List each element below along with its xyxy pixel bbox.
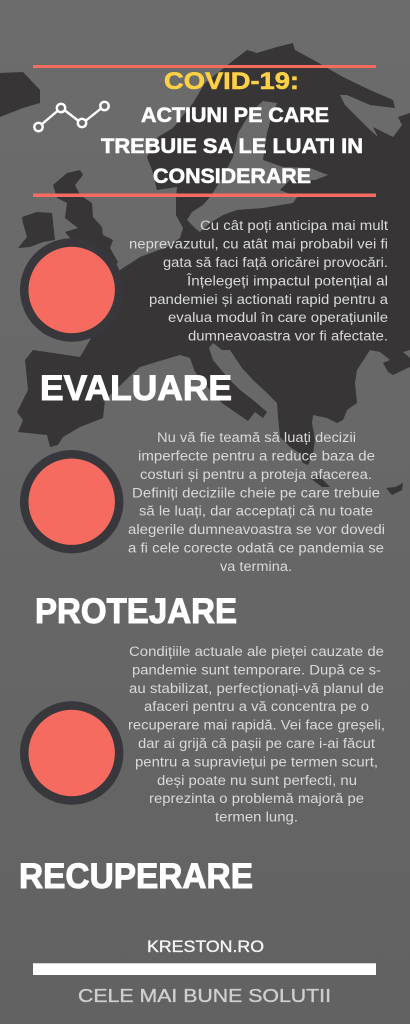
text block: intro: dumneavoastra vor fi afectate.: [188, 329, 388, 344]
map of Europe: [0, 43, 410, 495]
text block: intro: pandemiei și actionati rapid pentru a: [149, 292, 389, 307]
heading: RECUPERARE: RECUPERARE: [19, 856, 253, 896]
text block: recuperare: deși poate nu sunt perfecti, nu: [157, 773, 357, 788]
text block: protejare: să le luați, dar acceptați că nu toate: [139, 504, 373, 519]
text block: protejare: a fi cele corecte odată ce pandemia se: [128, 540, 384, 556]
text block: protejare: Nu vă fie teamă să luați decizii: [157, 430, 356, 445]
title top rule: [33, 65, 376, 68]
text block: intro: Cu cât poți anticipa mai mult: [200, 218, 388, 233]
text block: recuperare: Condițiile actuale ale pieței cauzate de: [129, 644, 384, 659]
text block: recuperare: termen lung.: [215, 810, 298, 825]
text block: protejare: Definiți deciziile cheie pe care trebuie: [132, 485, 380, 500]
text block: recuperare: recuperare mai rapidă. Vei face greșeli,: [128, 718, 385, 733]
title bottom rule: [33, 194, 376, 197]
icon: circle 1: [20, 238, 123, 342]
text block: protejare: alegerile dumneavoastra se vor dovedi: [128, 522, 385, 537]
text block: protejare: imperfecte pentru a reduce baza de: [138, 448, 375, 464]
text block: recuperare: dar ai grijă că pașii pe care i-ai făcut: [138, 736, 375, 751]
text block: intro: gata să faci față oricărei provocări.: [163, 255, 388, 270]
icon: line chart: [34, 102, 109, 131]
text block: recuperare: afaceri pentru a vă concentra pe o: [144, 699, 369, 714]
text block: protejare: va termina.: [220, 559, 292, 574]
icon: circle 3: [20, 701, 123, 805]
text block: recuperare: pentru a supraviețui pe termen scurt,: [135, 754, 378, 769]
footer: website: KRESTON.RO: [147, 938, 264, 956]
icon: circle 2: [20, 450, 123, 553]
heading: PROTEJARE: PROTEJARE: [35, 591, 237, 631]
text block: intro: neprevazutul, cu atât mai probabil vei fi: [129, 236, 388, 252]
footer: white bar: [33, 963, 376, 975]
text block: recuperare: [128, 644, 385, 825]
text block: protejare: costuri și pentru a proteja afacerea.: [140, 467, 372, 482]
footer: tagline: CELE MAI BUNE SOLUTII: [78, 985, 331, 1006]
title: COVID-19: COVID-19:: [164, 68, 299, 95]
title: subtitle lines: [101, 104, 363, 188]
title: subtitle lines: ACTIUNI PE CARE: [141, 104, 329, 127]
text block: intro: Înțelegeți impactul potențial al: [186, 273, 388, 288]
text block: recuperare: au stabilizat, perfecționați-vă planul de: [129, 681, 384, 696]
text block: intro: evalua modul în care operațiunile: [168, 310, 388, 325]
title block: [33, 65, 376, 197]
footer: [33, 938, 376, 1006]
heading: EVALUARE: EVALUARE: [40, 368, 232, 408]
text block: recuperare: pandemie sunt temporare. După ce s-: [132, 662, 381, 677]
text block: protejare: [128, 430, 385, 574]
title: subtitle lines: TREBUIE SA LE LUATI IN: [101, 135, 363, 158]
title: subtitle lines: CONSIDERARE: [153, 165, 311, 188]
text block: intro: [129, 218, 389, 344]
text block: recuperare: reprezinta o problemă majoră pe: [149, 791, 364, 806]
